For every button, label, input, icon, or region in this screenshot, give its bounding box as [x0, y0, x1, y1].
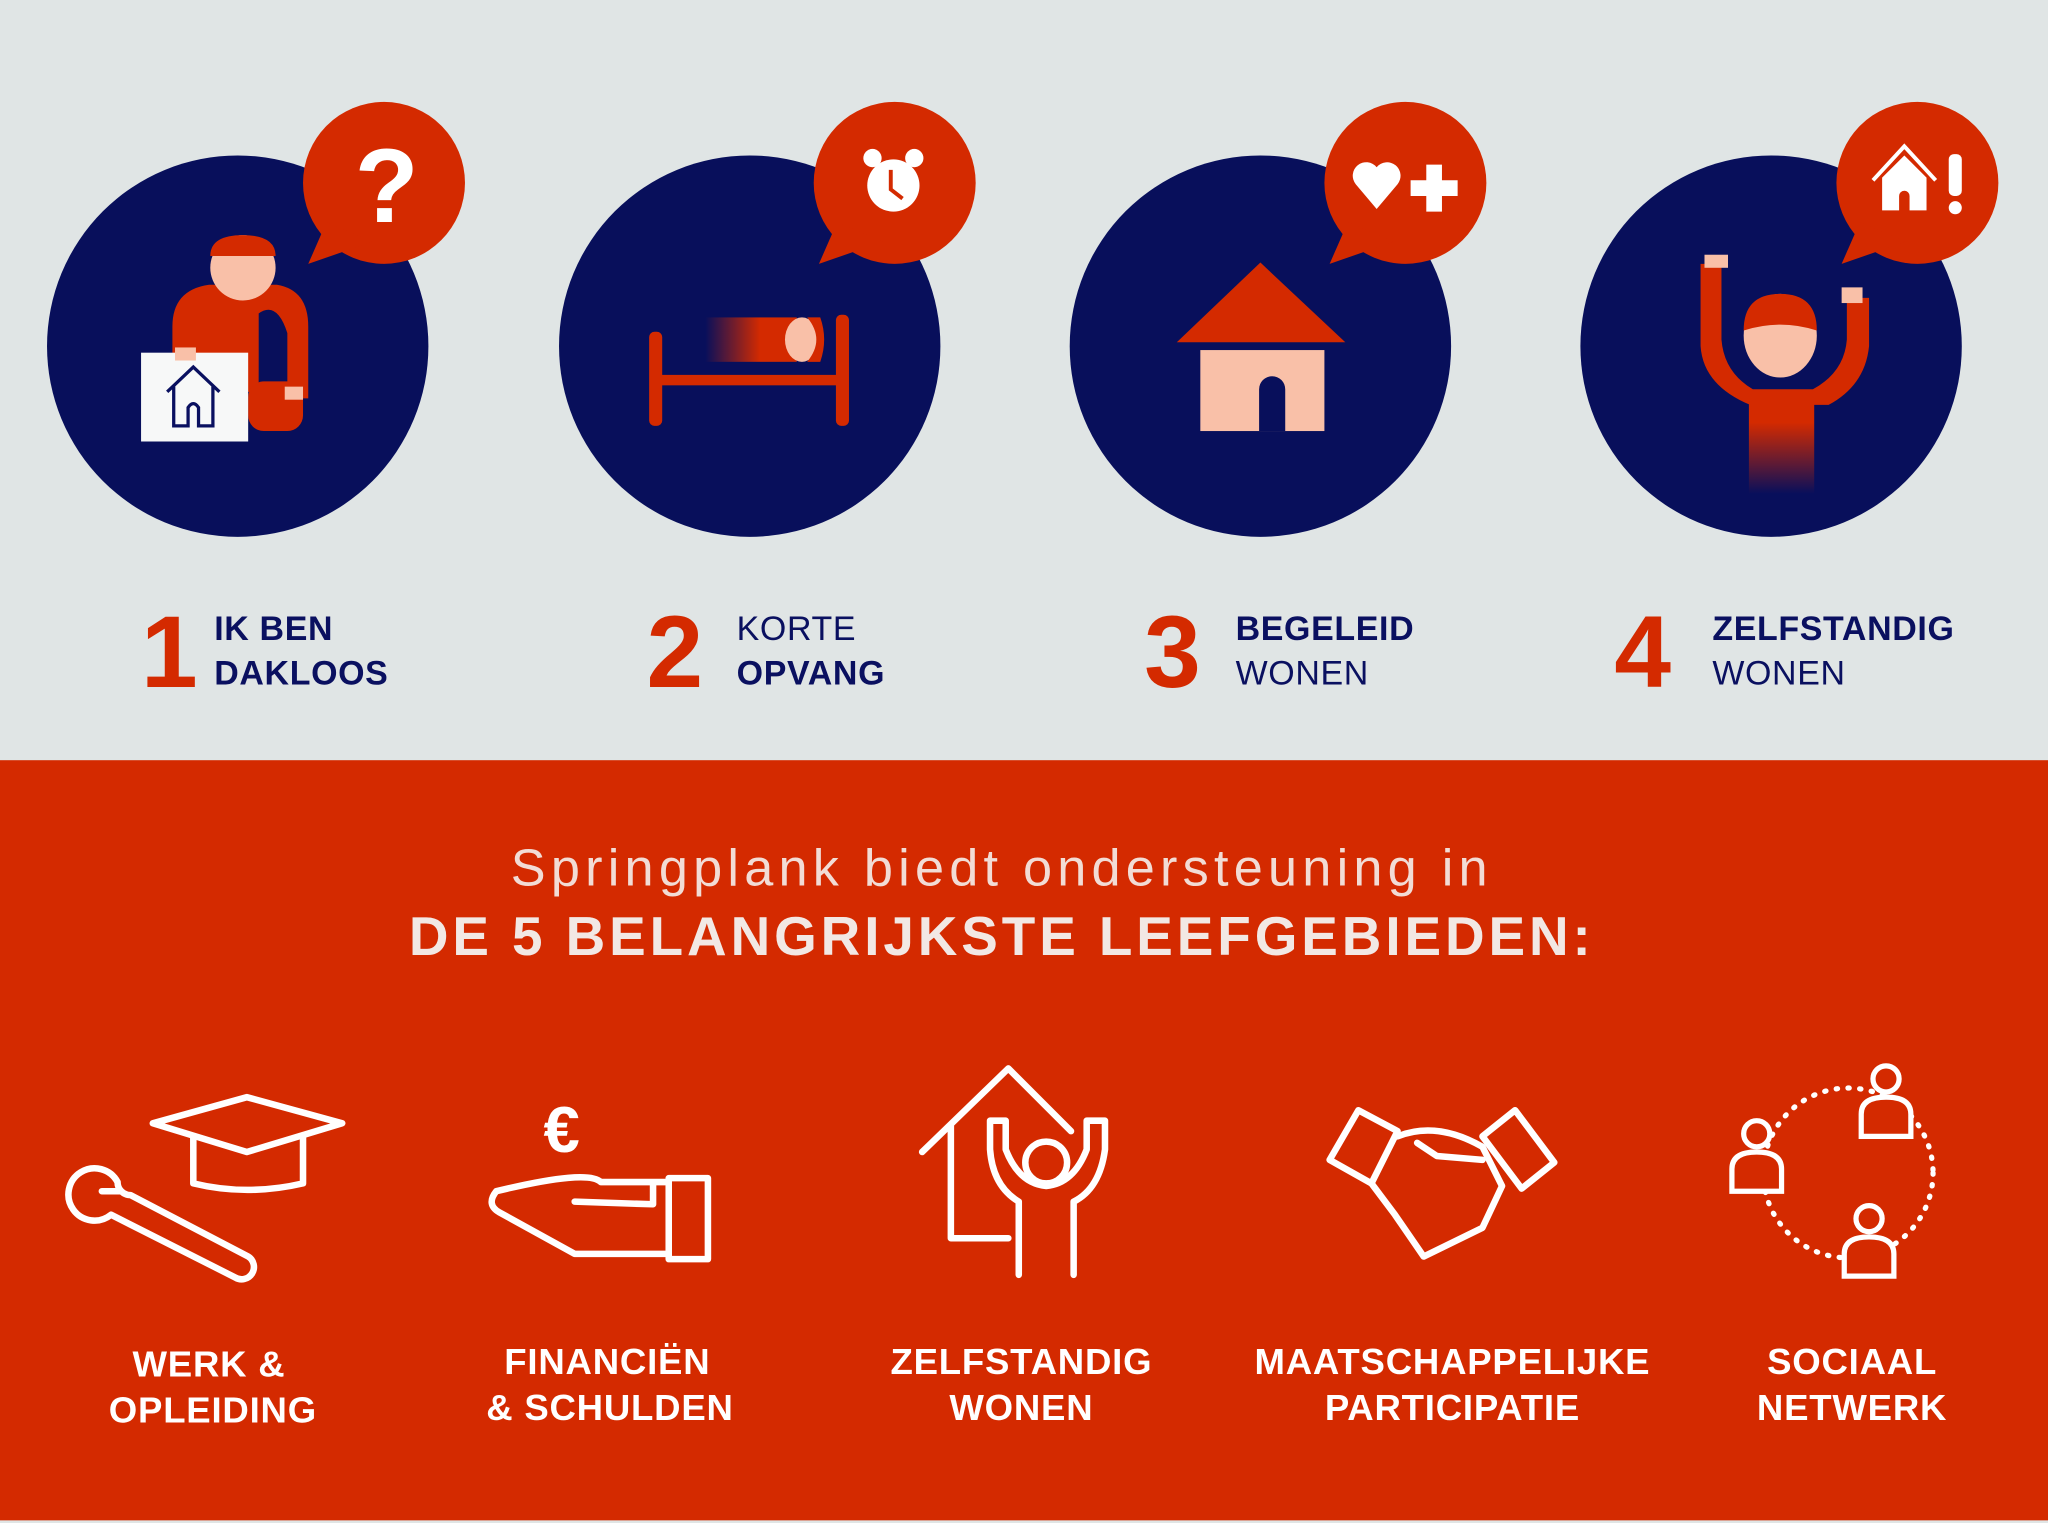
label: step 2: 2 [647, 595, 703, 709]
label: step 3: 3 [1144, 595, 1201, 709]
labels: leefgebieden: FINANCIËN [504, 1341, 710, 1382]
step 2 illustration [559, 102, 976, 537]
labels: leefgebieden: MAATSCHAPPELIJKE [1255, 1341, 1650, 1382]
label: step 2: KORTE [737, 610, 856, 648]
labels: leefgebieden: SOCIAAL [1767, 1341, 1937, 1382]
icon: person cheering [1701, 255, 1869, 494]
icon: werk & opleiding [68, 1097, 342, 1279]
icon: zelfstandig wonen [922, 1068, 1105, 1275]
icon: bed [649, 315, 849, 426]
icon: maatschappelijke participatie [1330, 1110, 1554, 1257]
label: step 3: WONEN [1236, 654, 1369, 692]
label: step 3 [1144, 595, 1414, 709]
step 4 illustration [1580, 102, 1998, 537]
bubble: question: ? [355, 128, 419, 245]
label: step 1 [141, 595, 388, 709]
bubble: house exclamation [1836, 102, 1998, 264]
step 3 illustration [1070, 102, 1486, 537]
labels: leefgebieden: & SCHULDEN [486, 1387, 734, 1428]
labels: leefgebieden: WERK & [132, 1344, 285, 1385]
label: step 1: DAKLOOS [214, 654, 388, 692]
icon: person holding sign [141, 235, 308, 442]
label: step 1: IK BEN [214, 610, 333, 648]
labels: leefgebieden: PARTICIPATIE [1325, 1387, 1580, 1428]
bubble: question [303, 102, 465, 264]
labels: leefgebieden: WONEN [949, 1387, 1093, 1428]
bubble: alarm clock [814, 102, 976, 264]
labels: leefgebieden: OPLEIDING [109, 1389, 317, 1430]
icon: financien [492, 1177, 708, 1259]
label: step 1: 1 [141, 595, 198, 709]
bubble: heart plus [1324, 102, 1486, 264]
label: step 2: OPVANG [737, 654, 885, 692]
label: step 4: 4 [1614, 595, 1671, 709]
labels: leefgebieden: ZELFSTANDIG [890, 1341, 1152, 1382]
label: step 4: ZELFSTANDIG [1712, 610, 1955, 648]
panel: bottom red section [0, 760, 2048, 1520]
label: step 4 [1614, 595, 1955, 709]
labels: leefgebieden: NETWERK [1757, 1387, 1947, 1428]
heading: Springplank biedt ondersteuning in [511, 840, 1493, 898]
label: step 4: WONEN [1712, 654, 1846, 692]
label: step 2 [647, 595, 885, 709]
heading: DE 5 BELANGRIJKSTE LEEFGEBIEDEN: [409, 905, 1595, 967]
heading [409, 840, 1595, 967]
step 1 illustration [47, 102, 465, 537]
icon: house [1177, 263, 1345, 431]
labels: leefgebieden [109, 1341, 1947, 1430]
icon: sociaal netwerk [1732, 1066, 1933, 1276]
label: step 3: BEGELEID [1236, 610, 1414, 648]
text: € [543, 1093, 580, 1166]
